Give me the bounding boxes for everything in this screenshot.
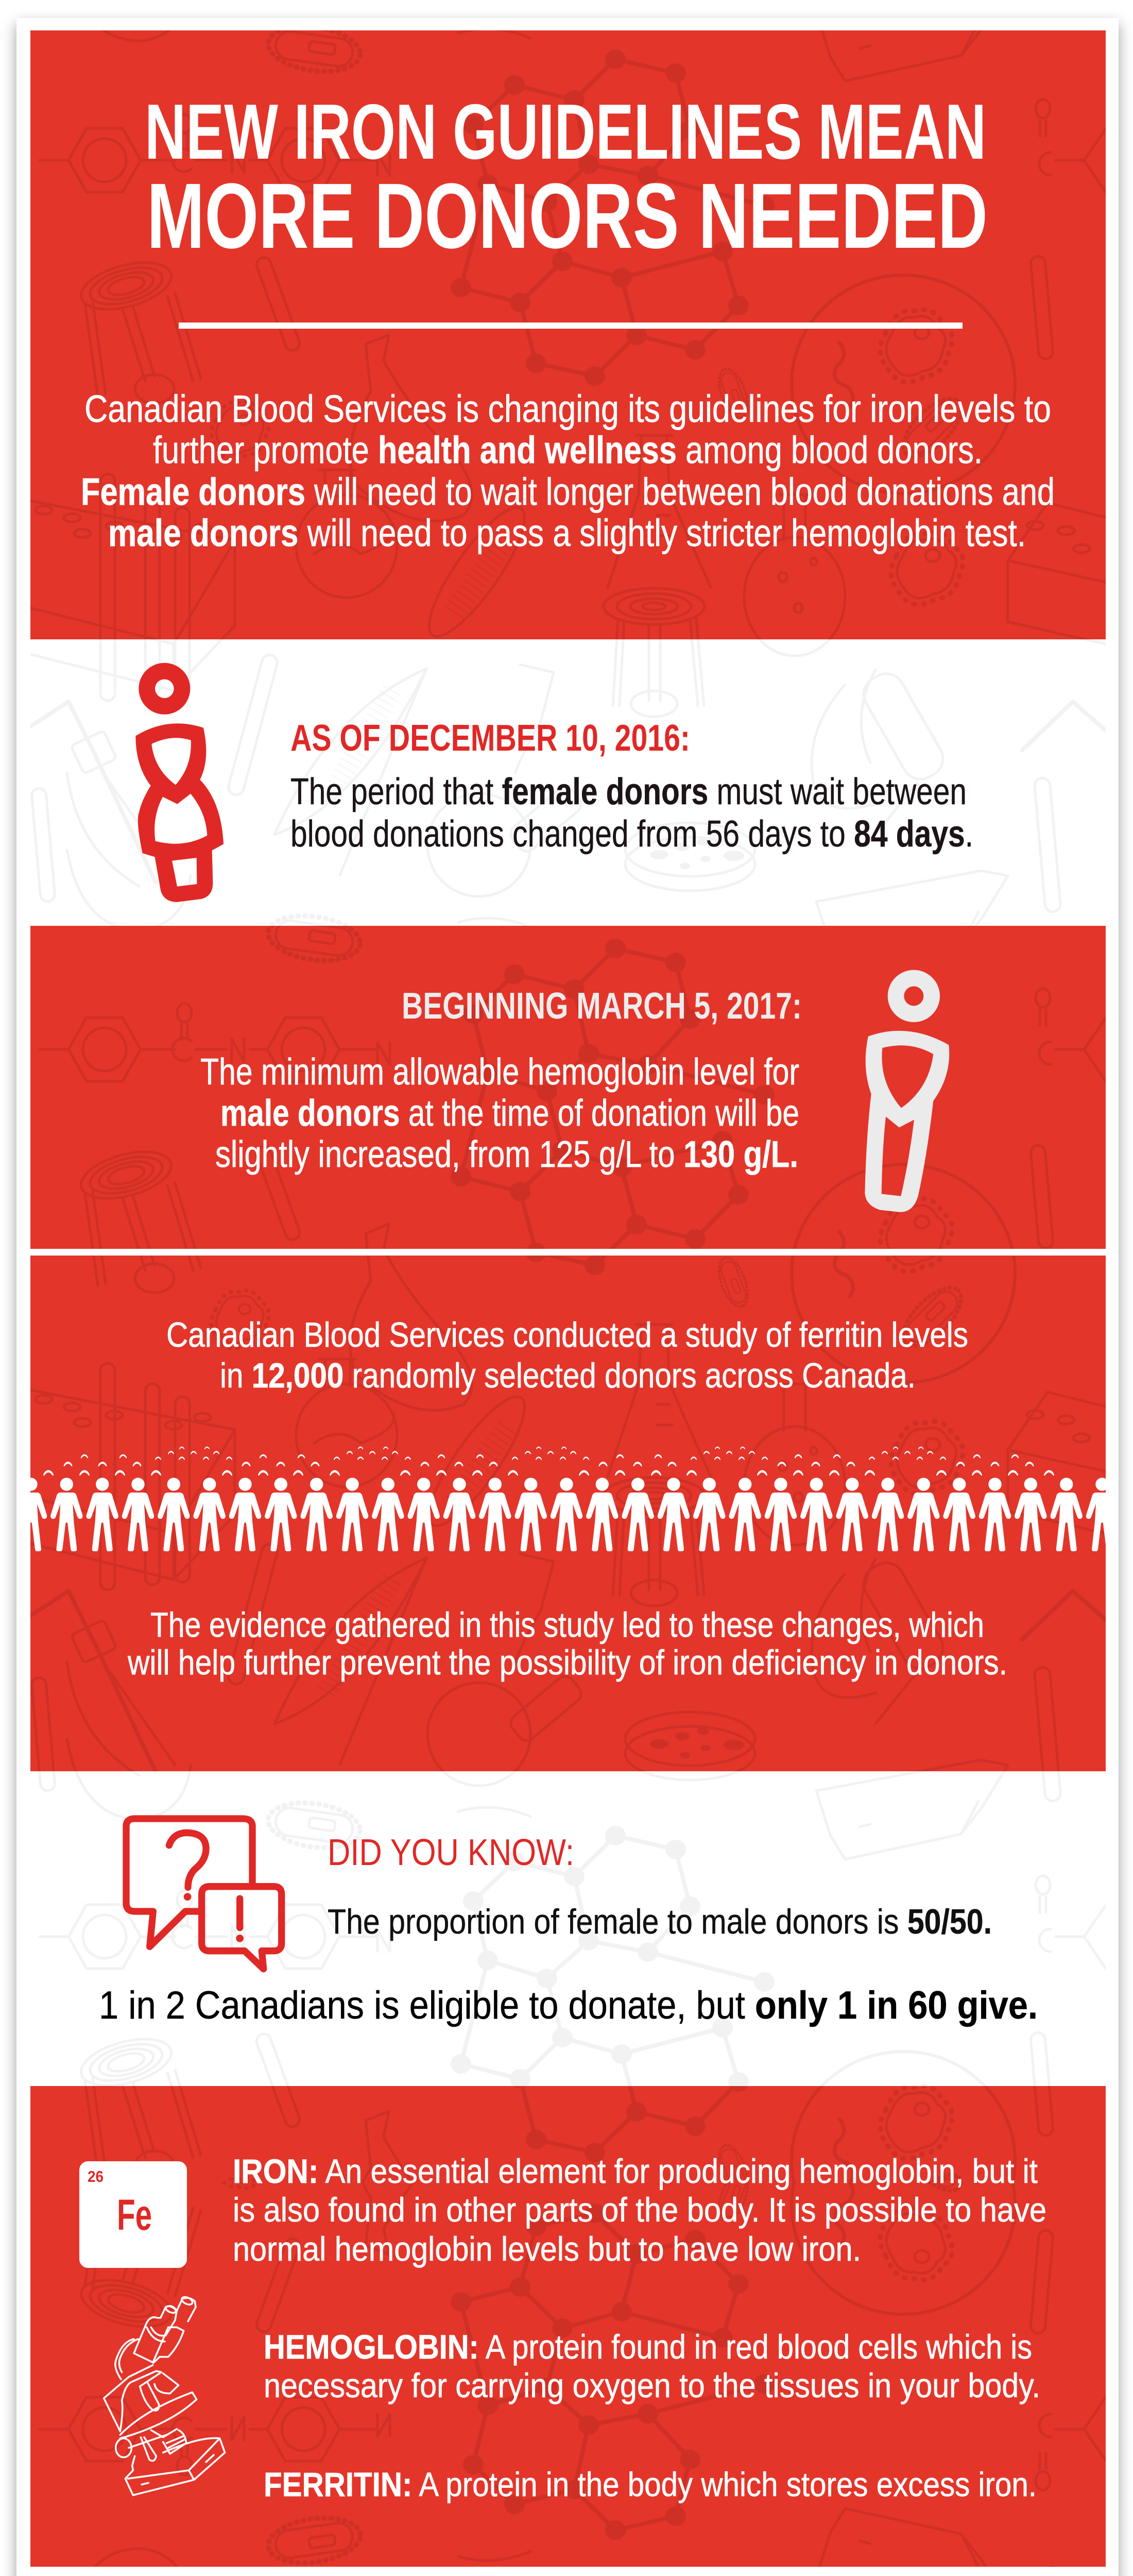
intro paragraph xyxy=(81,387,1055,554)
heading: did you know: DID YOU KNOW: xyxy=(328,1832,574,1873)
text: eligibility statistic: 1 in 2 Canadians is eligible to donate, but only 1 in 60 give. xyxy=(99,1984,1038,2027)
text: female wait period xyxy=(290,771,973,855)
panel: definitions xyxy=(30,2086,1106,2567)
text: hemoglobin definition xyxy=(264,2328,1040,2404)
text: study description: in 12,000 randomly selected donors across Canada. xyxy=(220,1356,916,1395)
title xyxy=(145,88,988,268)
icon: iron periodic table tile: Fe xyxy=(117,2191,152,2239)
crowd of donors pictogram xyxy=(15,1447,1118,1551)
text: male hemoglobin level: slightly increased, from 125 g/L to 130 g/L. xyxy=(215,1134,798,1175)
text: study description: Canadian Blood Services conducted a study of ferritin levels xyxy=(166,1315,968,1354)
panel: did you know xyxy=(30,1771,1106,2086)
icon: iron periodic table tile xyxy=(79,2161,187,2268)
intro paragraph: further promote health and wellness among blood donors. xyxy=(153,429,983,471)
text: ferritin definition: FERRITIN: A protein in the body which stores excess iron. xyxy=(264,2465,1037,2503)
text: male hemoglobin level xyxy=(200,1052,799,1175)
text: male hemoglobin level: The minimum allowable hemoglobin level for xyxy=(200,1052,799,1093)
date heading: March 2017: BEGINNING MARCH 5, 2017: xyxy=(402,986,802,1027)
panel: intro xyxy=(30,30,1106,639)
text: donor proportion: The proportion of female to male donors is 50/50. xyxy=(328,1902,992,1941)
panel: ferritin study xyxy=(30,1256,1106,1771)
icon: microscope xyxy=(104,2296,225,2495)
text: hemoglobin definition: HEMOGLOBIN: A protein found in red blood cells which is xyxy=(264,2328,1032,2366)
icon: iron periodic table tile: 26 xyxy=(88,2167,104,2185)
text: hemoglobin definition: necessary for carrying oxygen to the tissues in your body. xyxy=(264,2366,1040,2404)
panel: male donors xyxy=(30,926,1106,1249)
text: study description xyxy=(166,1315,968,1395)
text: female wait period: The period that female donors must wait between xyxy=(290,771,967,812)
text: iron definition xyxy=(233,2152,1046,2268)
title divider rule xyxy=(179,323,963,329)
icon: female donor xyxy=(135,663,224,902)
icon: question and exclamation speech bubbles xyxy=(126,1819,282,1969)
text: male hemoglobin level: male donors at the time of donation will be xyxy=(220,1093,799,1134)
date heading: December 2016: AS OF DECEMBER 10, 2016: xyxy=(290,718,690,759)
icon: male donor xyxy=(865,970,949,1212)
text: evidence summary xyxy=(127,1605,1007,1682)
text: iron definition: normal hemoglobin levels but to have low iron. xyxy=(233,2230,861,2268)
text: female wait period: blood donations changed from 56 days to 84 days. xyxy=(290,814,973,855)
text: iron definition: IRON: An essential element for producing hemoglobin, but it xyxy=(233,2152,1038,2190)
panel: female donors xyxy=(30,639,1106,926)
